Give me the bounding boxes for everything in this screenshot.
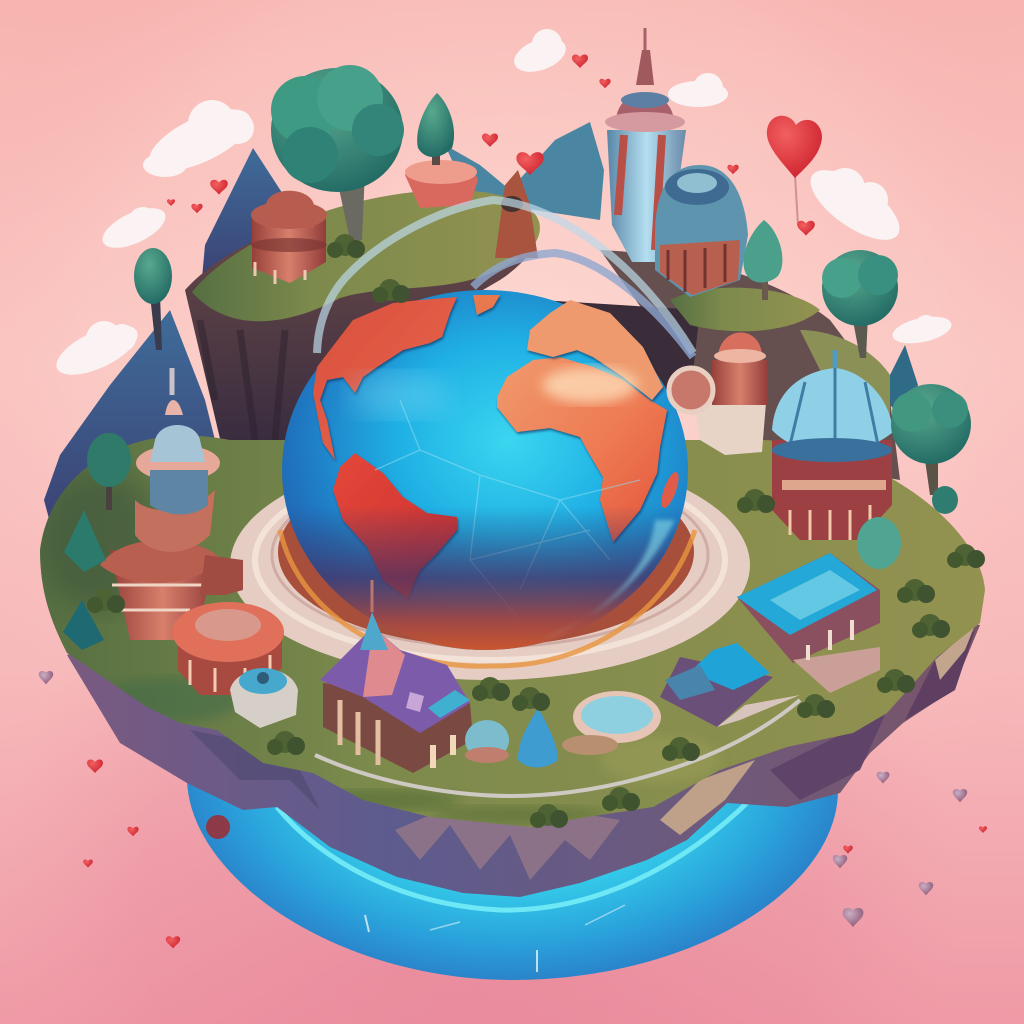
- globe cracks: [375, 400, 640, 620]
- blue cone hut: [465, 708, 558, 768]
- tree: far right large: [891, 384, 971, 495]
- cloud: right large: [800, 157, 910, 253]
- tree: left cone: [134, 248, 172, 350]
- right small tower: [669, 332, 768, 455]
- ring path around globe: [230, 450, 750, 680]
- tree: right round: [822, 250, 898, 358]
- continent: north america: [313, 297, 457, 460]
- cloud: far left: [50, 315, 144, 385]
- tree: top centre: [417, 93, 454, 165]
- cloud: top centre: [509, 29, 571, 78]
- glass bubble arc over globe: [317, 200, 693, 357]
- tree: lawn bush: [857, 517, 901, 569]
- island top surface: [40, 436, 985, 827]
- glass dome building: [772, 350, 893, 540]
- tree: left lower: [63, 600, 104, 650]
- cloud: by tower: [668, 73, 728, 107]
- trees: [63, 65, 971, 650]
- glass tower: [605, 28, 686, 262]
- tree: small right: [932, 486, 958, 514]
- tree: left mid: [87, 433, 131, 510]
- blue roof mansion: [737, 553, 880, 693]
- round red pavilion: [172, 602, 284, 695]
- tree: right of capsule: [743, 220, 782, 300]
- small blue dome hut: [230, 668, 298, 728]
- globe: [282, 290, 688, 650]
- sea disc under island: [187, 720, 838, 980]
- continent: greenland: [473, 295, 500, 315]
- highlight on africa: [542, 367, 638, 403]
- back mountains: [44, 122, 918, 560]
- purple roof house: [320, 580, 473, 773]
- cloud: right small: [890, 312, 954, 348]
- continent: africa: [497, 357, 667, 542]
- left tall tower: [100, 368, 243, 640]
- glass capsule building: [655, 165, 748, 297]
- pathway: [315, 700, 800, 796]
- small round pool: [562, 691, 661, 755]
- upper left cliff plateau: [185, 190, 540, 470]
- tree: left low: [64, 510, 106, 572]
- upper right plateau: [540, 250, 900, 480]
- cloud: left small: [97, 200, 171, 256]
- clouds: [50, 29, 954, 385]
- continent: europe and asia: [527, 300, 663, 400]
- tree: big top left: [271, 65, 404, 240]
- continent: madagascar: [658, 470, 682, 510]
- top centre dome building: [405, 160, 538, 258]
- island rock underside: [67, 600, 980, 897]
- continent: south america: [333, 453, 457, 598]
- lower blue house: [660, 643, 800, 727]
- heart balloon: [767, 116, 822, 225]
- shrubs: [87, 234, 985, 828]
- cloud: upper left: [141, 97, 259, 183]
- top left round building: [251, 191, 327, 284]
